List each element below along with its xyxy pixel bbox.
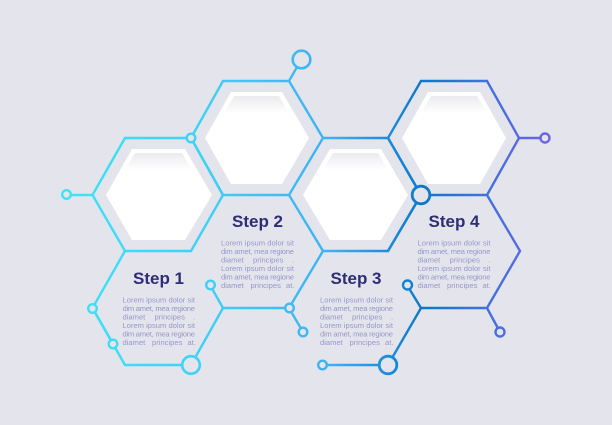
text block: step 1: diamet (122, 338, 146, 347)
panel: step 2 white hexagon (205, 92, 309, 184)
node: step 4 right (540, 134, 550, 142)
node: step 3 large bottom (379, 356, 397, 374)
node: step 1 lower (109, 340, 117, 348)
text block: step 4: Lorem ipsum dolor sit (418, 264, 491, 273)
text block: step 4: dim amet, mea regione (418, 247, 490, 256)
panel: step 1 white hexagon (106, 149, 212, 240)
node: step 4 large junction (412, 186, 430, 204)
text block: step 2: principes (250, 281, 281, 290)
heading: step 1: Step 1 (133, 269, 184, 288)
text block: step 2: dim amet, mea regione (221, 272, 294, 282)
text block: step 3: . (391, 312, 393, 322)
text block: step 2: Lorem ipsum dolor sit (221, 264, 295, 273)
text block: step 4: principes (450, 256, 480, 264)
text block: step 4: dim amet, mea regione (418, 272, 490, 282)
node: step 4 lower left (403, 280, 412, 290)
node: step 2 top (293, 51, 310, 68)
heading: step 3: Step 3 (330, 269, 382, 288)
connector nodes (62, 51, 549, 374)
text block: step 1: dim amet, mea regione (122, 304, 195, 313)
text block: step 3: diamet (320, 312, 344, 322)
hexagon network lines (67, 60, 545, 365)
text block: step 4: Lorem ipsum dolor sit (418, 238, 491, 248)
text block: step 1: at. (188, 338, 196, 347)
heading: step 2: Step 2 (232, 212, 283, 231)
node: step 1 top right (187, 134, 195, 142)
node: step 2 lower left (206, 281, 215, 289)
text block: step 3: Lorem ipsum dolor sit (320, 296, 394, 304)
text block: step 3: diamet (320, 338, 344, 347)
text block: step 2: diamet (221, 256, 245, 264)
text block: step 1: dim amet, mea regione (122, 330, 195, 338)
text block: step 1: principes (152, 338, 183, 347)
text block: step 3: dim amet, mea regione (320, 330, 393, 338)
panel: step 3 white hexagon (303, 149, 408, 240)
node: step 1 left lower (88, 304, 97, 313)
text block: step 3: principes (350, 338, 380, 347)
node: step 4 bottom (496, 328, 504, 336)
text block: step 1: Lorem ipsum dolor sit (122, 321, 196, 330)
panel: step 4 white hexagon (402, 92, 506, 184)
text block: step 1: . (193, 312, 195, 322)
text block: step 2: at. (286, 281, 294, 290)
text block: step 1: principes (154, 312, 185, 322)
node: step 1 left (62, 190, 71, 199)
text block: step 4 (418, 238, 491, 290)
text block: step 4: principes (447, 281, 478, 290)
text block: step 2 (221, 238, 295, 290)
text block: step 4: at. (482, 281, 491, 290)
text block: step 3: at. (385, 338, 393, 347)
text block: step 3 (320, 296, 394, 347)
text block: step 1 (122, 296, 196, 347)
text block: step 4: diamet (418, 256, 441, 264)
text block: step 4: . (488, 256, 491, 264)
text block: step 3: dim amet, mea regione (320, 304, 393, 313)
node: step 1 large bottom (182, 356, 200, 374)
text block: step 2: dim amet, mea regione (221, 247, 294, 256)
node: step 2 lower right (285, 304, 294, 312)
text block: step 2: diamet (221, 281, 245, 290)
text block: step 1: diamet (122, 312, 146, 322)
node: step 3 bottom left (318, 361, 327, 369)
text block: step 4: diamet (418, 281, 441, 290)
heading: step 4: Step 4 (428, 212, 480, 231)
text block: step 2: . (292, 256, 294, 264)
text block: step 1: Lorem ipsum dolor sit (122, 296, 196, 304)
node: step 2 bottom (299, 328, 307, 336)
text block: step 2: principes (253, 256, 284, 264)
text block: step 3: principes (352, 312, 383, 322)
text block: step 3: Lorem ipsum dolor sit (320, 321, 394, 330)
text block: step 2: Lorem ipsum dolor sit (221, 238, 295, 248)
